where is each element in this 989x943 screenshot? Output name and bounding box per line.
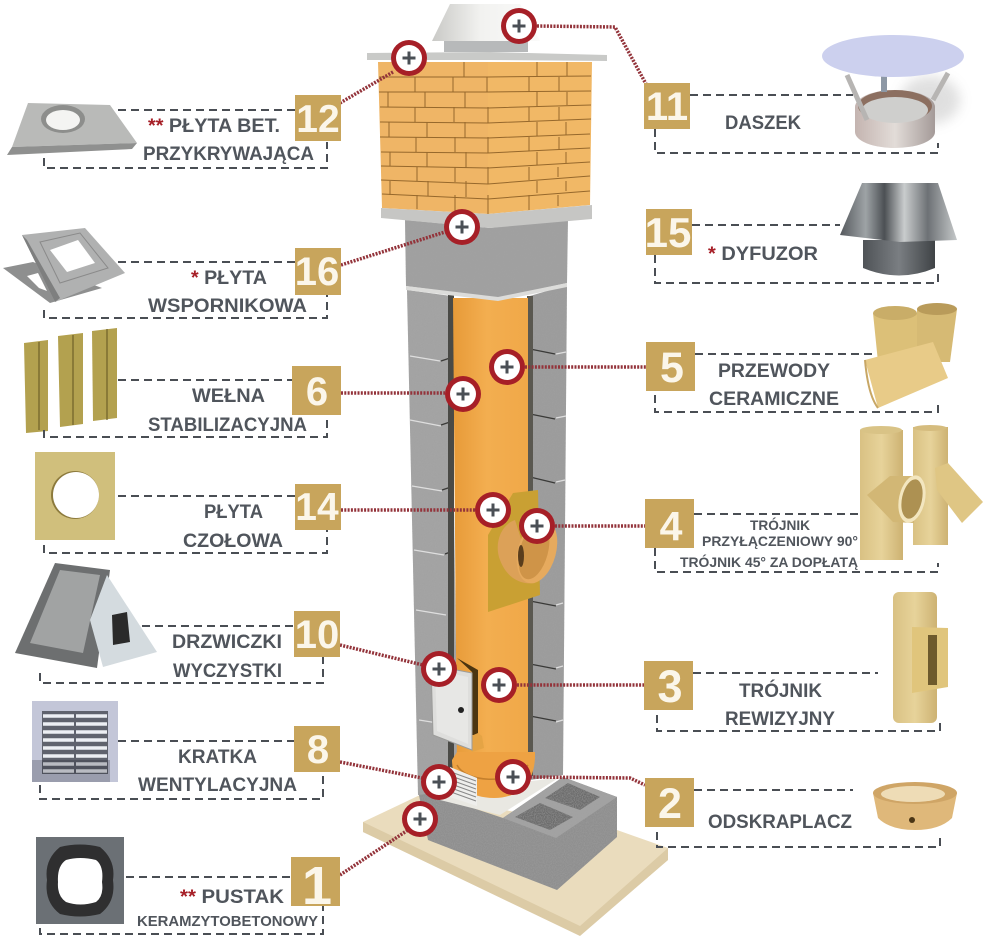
icon: cover plate (7, 103, 137, 155)
label: WSPORNIKOWA (148, 295, 307, 317)
concrete base block (418, 777, 617, 890)
label: ** PUSTAK (180, 886, 284, 908)
label: PRZYŁĄCZENIOWY 90° (702, 533, 858, 549)
ventilation grille (450, 767, 477, 806)
cleanout recess (457, 658, 484, 752)
marker: 5 (489, 349, 525, 385)
marker: 11 (501, 8, 537, 44)
icon: condensate tray (873, 782, 957, 830)
label: ODSKRAPLACZ (708, 811, 852, 833)
number badge: 8 (307, 728, 329, 772)
label (172, 631, 282, 682)
label (725, 678, 835, 730)
label: REWIZYJNY (725, 708, 835, 730)
label: WYCZYSTKI (173, 660, 282, 682)
item 16: bracket plate (3, 228, 341, 318)
item 6: stabilising wool (24, 328, 341, 437)
number badge: 12 (296, 98, 340, 141)
icon: bracket plate (3, 228, 125, 303)
chimney illustration (363, 4, 668, 936)
tee connector panel (488, 490, 564, 612)
icon: hollow block (36, 837, 124, 924)
icon: ventilation grille (32, 701, 118, 782)
label (138, 746, 297, 796)
label: CZOŁOWA (183, 530, 283, 552)
label: KRATKA (178, 746, 257, 768)
label: PŁYTA (204, 501, 263, 523)
number badge (646, 342, 695, 392)
number badge (291, 856, 340, 916)
icon: cleanout door (15, 563, 157, 668)
item 12: concrete cover plate (7, 95, 341, 168)
icon: wool strips (24, 328, 117, 433)
ceramic flue (453, 298, 528, 770)
item 4: connection tee (645, 425, 983, 572)
number badge: 16 (295, 250, 339, 294)
dark insulation gap (448, 292, 533, 776)
icon: tee pieces (860, 425, 983, 560)
brick crown (378, 62, 592, 214)
marker: 1 (402, 801, 438, 837)
marker: 10 (421, 651, 457, 687)
item 5: ceramic flues (646, 303, 957, 412)
number badge (645, 778, 694, 828)
label: KERAMZYTOBETONOWY (137, 913, 318, 930)
label: PRZYKRYWAJĄCA (143, 143, 314, 165)
label (137, 886, 318, 930)
number badge (644, 661, 693, 712)
number badge: 4 (660, 503, 683, 549)
marker: 14 (475, 492, 511, 528)
icon: inspection tee (893, 592, 948, 723)
number badge: 1 (302, 856, 332, 916)
marker: 6 (445, 376, 481, 412)
label: PRZEWODY (718, 360, 830, 382)
wall block joints (410, 352, 566, 725)
item 15: diffuser (645, 183, 957, 283)
label (680, 516, 858, 570)
crown cover plate (367, 52, 607, 61)
label: TRÓJNIK (739, 678, 822, 702)
cleanout door (431, 665, 472, 750)
label: WENTYLACYJNA (138, 774, 297, 796)
number badge: 5 (660, 344, 684, 392)
item 10: cleanout door (15, 563, 340, 683)
label (148, 267, 307, 317)
number badge: 15 (645, 209, 691, 256)
marker: 2 (495, 759, 531, 795)
number badge: 14 (295, 486, 339, 529)
white floor plate (440, 777, 560, 815)
label: CERAMICZNE (709, 388, 839, 410)
label: TRÓJNIK 45° ZA DOPŁATĄ (680, 553, 858, 570)
marker: 12 (391, 40, 427, 76)
label (709, 360, 839, 410)
number badge (294, 726, 340, 772)
upper concrete block (405, 218, 568, 298)
number badge: 6 (306, 370, 328, 414)
leader lines (340, 26, 646, 875)
marker: 16 (444, 209, 480, 245)
number badge (645, 499, 694, 549)
number badge: 11 (646, 85, 688, 129)
marker: 4 (519, 508, 555, 544)
number badge: 3 (657, 661, 683, 712)
label: ** PŁYTA BET. (148, 115, 280, 137)
icon: diffuser (840, 183, 957, 276)
number badge: 10 (295, 613, 339, 657)
chimney cap (432, 4, 540, 52)
label: TRÓJNIK (750, 516, 810, 533)
label (143, 115, 314, 165)
label: WEŁNA (192, 385, 265, 407)
label: * PŁYTA (191, 267, 267, 289)
item 8: ventilation grille (32, 701, 340, 799)
foundation slab (363, 795, 668, 936)
label: STABILIZACYJNA (148, 414, 307, 436)
icon: face plate (35, 452, 115, 540)
item 1: concrete hollow block (36, 837, 340, 934)
marker: 3 (481, 667, 517, 703)
item 3: inspection tee (644, 592, 948, 731)
item 11: cowl (644, 35, 964, 153)
number badge: 2 (658, 780, 682, 828)
label (183, 501, 283, 552)
lower walls (407, 285, 567, 795)
item 2: condensate tray (645, 778, 957, 847)
number badge (292, 366, 341, 415)
marker: 8 (421, 764, 457, 800)
icon: ceramic flues (865, 303, 957, 408)
label: * DYFUZOR (708, 243, 818, 265)
label: DASZEK (725, 112, 801, 134)
label (148, 385, 307, 436)
concrete collar (381, 205, 592, 228)
label: DRZWICZKI (172, 631, 282, 653)
flue foot ring (452, 752, 535, 798)
item 14: face plate (35, 452, 341, 553)
icon: cowl (822, 35, 964, 148)
